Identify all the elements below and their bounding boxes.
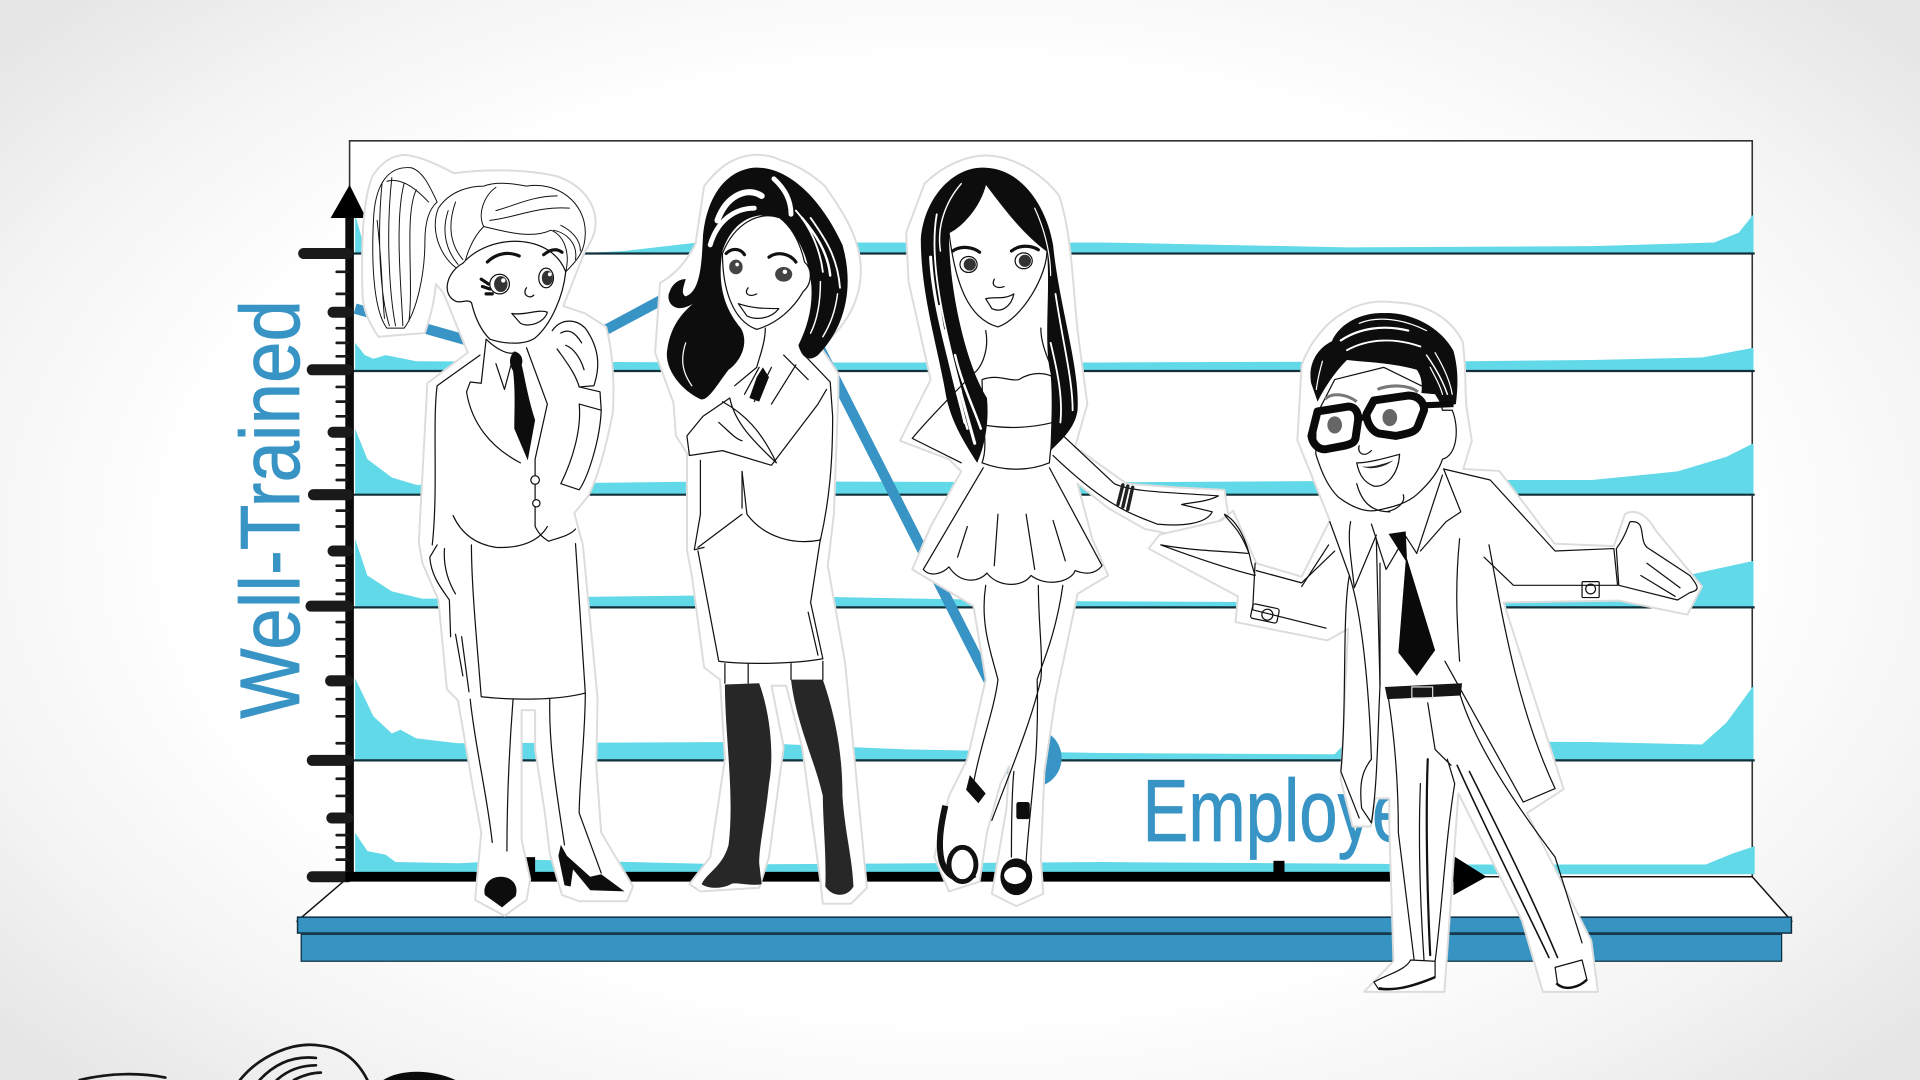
blonde shoes xyxy=(484,845,624,907)
x axis label: Employee xyxy=(1142,761,1449,860)
blonde skirt and legs xyxy=(456,544,601,873)
man hair xyxy=(1310,313,1457,407)
strapless top and arms xyxy=(912,328,1218,525)
y axis with ticks and arrow xyxy=(304,185,366,880)
blue trend line with end dot xyxy=(355,244,1062,787)
character: man with glasses in white coat xyxy=(1149,302,1702,992)
bracelet xyxy=(1118,485,1133,509)
character: brunette woman with crossed arms xyxy=(655,155,867,904)
shelf xyxy=(298,877,1791,961)
character: blonde woman in suit xyxy=(362,155,633,916)
y axis label: Well-Trained xyxy=(223,300,317,719)
crossed legs xyxy=(973,585,1063,863)
man shirt collar xyxy=(1371,475,1442,686)
strappy black shoes xyxy=(940,775,1032,895)
chart grid lines xyxy=(353,253,1755,760)
man shoes xyxy=(1374,960,1587,990)
brunette boots xyxy=(702,680,853,895)
partial hair of character at bottom edge xyxy=(80,1045,456,1080)
long hair xyxy=(921,168,1078,463)
thick glasses xyxy=(1311,396,1453,449)
black tie xyxy=(1389,531,1435,676)
hair bun and fringe xyxy=(435,183,585,272)
ponytail xyxy=(373,168,437,328)
chart board xyxy=(350,141,1753,877)
belt xyxy=(1385,683,1462,699)
blonde face xyxy=(447,241,566,343)
brunette jacket with crossed arms xyxy=(687,328,833,550)
brunette skirt xyxy=(698,539,823,683)
blonde suit jacket, tie and hand xyxy=(430,321,601,637)
brunette face xyxy=(722,216,810,329)
teal band chart areas xyxy=(355,214,1755,874)
x axis with tick and arrow xyxy=(345,856,1487,895)
brunette hair mass xyxy=(667,168,848,399)
lab coat and arms xyxy=(1161,469,1697,823)
flared skirt xyxy=(923,468,1102,584)
trousers and legs xyxy=(1389,693,1582,961)
character: long-haired woman in skirt xyxy=(900,156,1228,906)
man face xyxy=(1316,367,1456,512)
long-haired face xyxy=(949,184,1047,327)
